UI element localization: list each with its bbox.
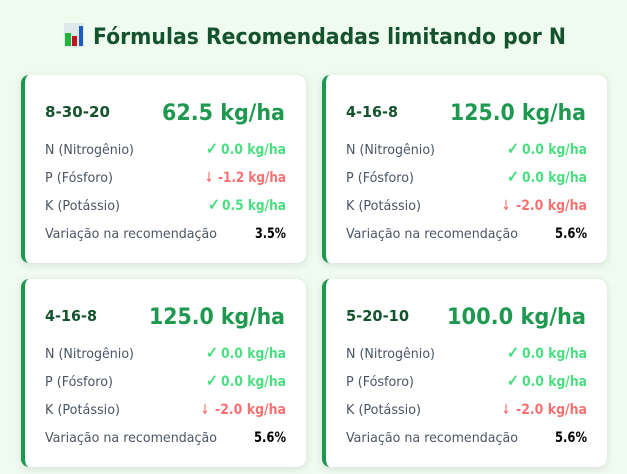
row: N: ✓ (507, 139, 519, 158)
row: P (346, 371, 587, 390)
row: variation: Variação na recomendação (346, 431, 518, 446)
row: P (45, 170, 286, 186)
dose: 100.0 kg/ha (447, 305, 586, 330)
dose: 125.0 kg/ha (149, 305, 285, 330)
row: K (346, 198, 587, 214)
formula name: 8-30-20 (45, 103, 110, 121)
row: K: ↓ (201, 402, 209, 418)
row: variation: 5.6% (555, 226, 587, 242)
formula name: 5-20-10 (346, 307, 409, 325)
row: K: -2.0 kg/ha (215, 402, 286, 418)
row: P (346, 167, 587, 186)
row: N (346, 139, 587, 158)
row: N: 0.0 kg/ha (221, 346, 286, 362)
panel: 4-16-8 bottom (21, 279, 306, 467)
row: N: ✓ (206, 343, 218, 362)
row: N: N (Nitrogênio) (346, 142, 435, 158)
dose: 62.5 kg/ha (162, 101, 285, 126)
panel: 8-30-20 (21, 75, 306, 263)
row: K: ↓ (502, 402, 510, 418)
row: P: -1.2 kg/ha (218, 170, 286, 186)
row: K: -2.0 kg/ha (516, 198, 587, 214)
row: variation: 3.5% (255, 226, 286, 242)
row: N: N (Nitrogênio) (346, 346, 435, 362)
row: K: K (Potássio) (45, 198, 120, 214)
icon: bar chart (64, 23, 84, 47)
row: K: K (Potássio) (346, 198, 421, 214)
row: K: ✓ (208, 195, 220, 214)
row: K: 0.5 kg/ha (222, 198, 286, 214)
row: variation: Variação na recomendação (45, 431, 217, 446)
row: N: N (Nitrogênio) (45, 142, 134, 158)
row: variation: Variação na recomendação (346, 227, 518, 242)
row: P: P (Fósforo) (45, 374, 113, 390)
row: P: ✓ (206, 371, 218, 390)
formula name: 4-16-8 (45, 307, 97, 325)
row: P: 0.0 kg/ha (522, 374, 587, 390)
row: N (346, 343, 587, 362)
row: variation: 5.6% (254, 430, 286, 446)
row: P: ✓ (507, 371, 519, 390)
row: P: P (Fósforo) (45, 170, 113, 186)
row: P: P (Fósforo) (346, 170, 414, 186)
row: K (45, 195, 286, 214)
formula name: 4-16-8 (346, 103, 398, 121)
panel: 5-20-10 (322, 279, 607, 467)
panel: 4-16-8 top (322, 75, 607, 263)
row: N (45, 139, 286, 158)
dose: 125.0 kg/ha (450, 101, 586, 126)
row: K: ↓ (502, 198, 510, 214)
row: K: K (Potássio) (346, 402, 421, 418)
row: P: ✓ (507, 167, 519, 186)
row: N: ✓ (206, 139, 218, 158)
row: P (45, 371, 286, 390)
row: P: 0.0 kg/ha (522, 170, 587, 186)
row: K: -2.0 kg/ha (516, 402, 587, 418)
row: K: K (Potássio) (45, 402, 120, 418)
row: P: 0.0 kg/ha (221, 374, 286, 390)
row: N (45, 343, 286, 362)
row: N: ✓ (507, 343, 519, 362)
row: K (346, 402, 587, 418)
row: N: 0.0 kg/ha (221, 142, 286, 158)
row: variation: Variação na recomendação (45, 227, 217, 242)
row: N: 0.0 kg/ha (522, 346, 587, 362)
row: N: N (Nitrogênio) (45, 346, 134, 362)
row: N: 0.0 kg/ha (522, 142, 587, 158)
row: K (45, 402, 286, 418)
row: P: ↓ (205, 170, 213, 186)
row: P: P (Fósforo) (346, 374, 414, 390)
title: Fórmulas Recomendadas limitando por N (93, 25, 566, 50)
row: variation: 5.6% (555, 430, 587, 446)
